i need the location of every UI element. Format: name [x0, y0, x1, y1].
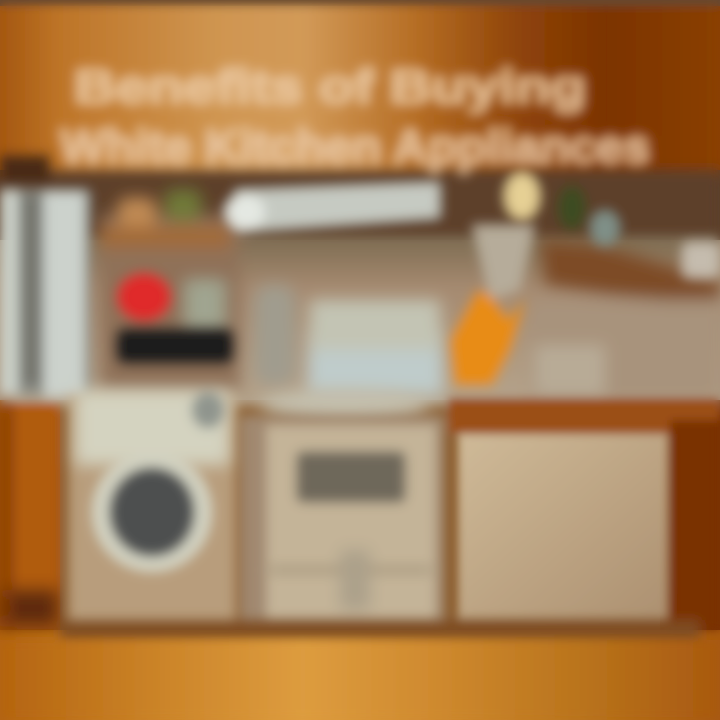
glass backsplash	[308, 300, 443, 395]
icon: red pot	[117, 273, 171, 321]
dishwasher panel	[458, 434, 668, 620]
title	[60, 61, 650, 174]
stove top	[260, 389, 430, 421]
oven	[240, 415, 445, 627]
upper wood wall	[0, 0, 720, 180]
washer door	[92, 452, 212, 572]
base shadow	[60, 620, 700, 640]
washing machine	[68, 390, 236, 627]
backsplash wall	[0, 236, 720, 406]
orange vase	[450, 225, 535, 385]
oven window	[297, 452, 405, 502]
green plant	[558, 186, 586, 230]
yellow lamp	[504, 172, 540, 220]
kettle	[255, 285, 295, 385]
refrigerator	[0, 190, 90, 397]
icon: black pan	[116, 328, 234, 364]
wood floor	[0, 640, 720, 720]
right counter shelf	[530, 240, 720, 400]
shelf items: left	[100, 190, 240, 390]
washer window	[110, 468, 194, 556]
title line 1: Benefits of Buying	[74, 61, 586, 114]
right shelf white item	[682, 242, 720, 278]
lower right wood cabinet	[448, 398, 720, 630]
range hood	[225, 182, 440, 232]
dark shelf band	[0, 155, 720, 240]
title line 2: White Kitchen Appliances	[60, 121, 650, 174]
lower left wood cabinet	[0, 403, 58, 628]
oven drawer	[268, 565, 433, 575]
teal jar	[590, 210, 620, 246]
